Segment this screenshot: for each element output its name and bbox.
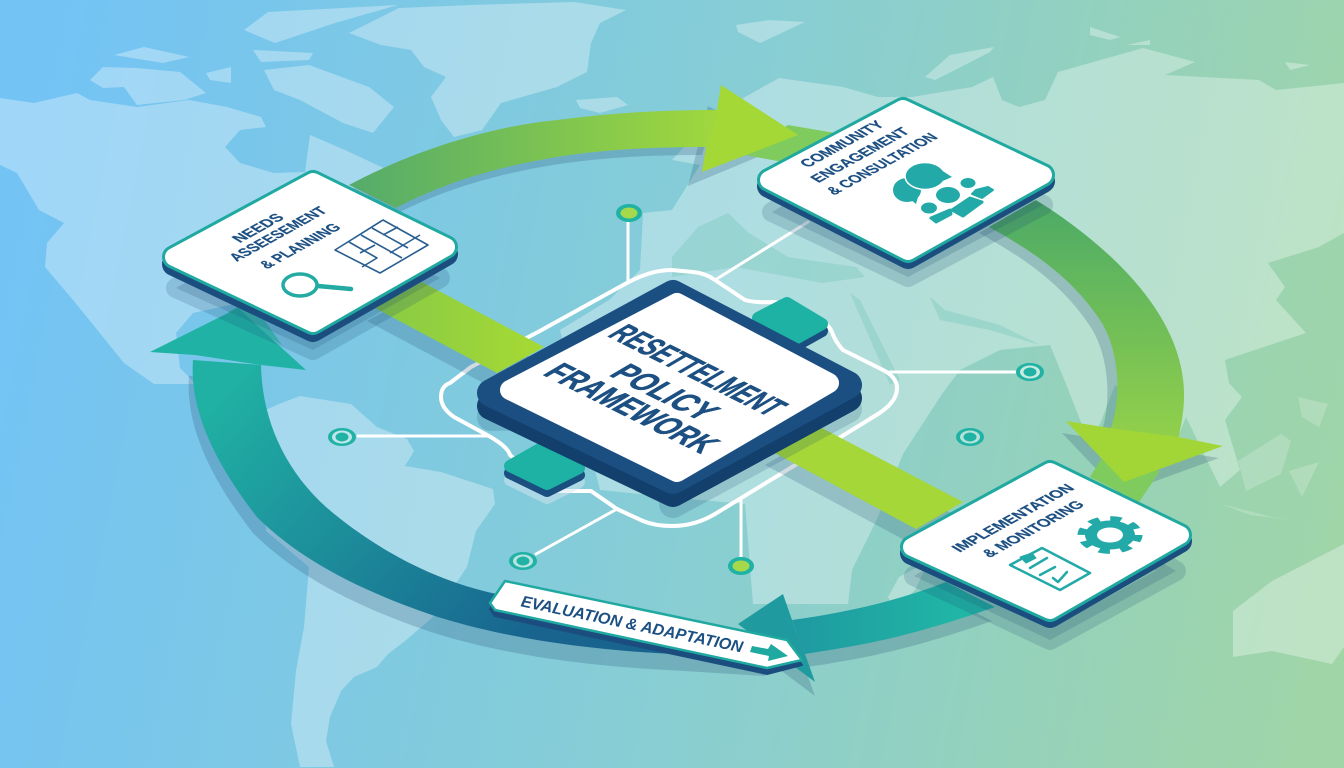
card label text: COMMUNITY <box>796 118 888 170</box>
card label text: & MONITORING <box>978 498 1089 560</box>
southeast asian islands <box>1221 397 1328 520</box>
lime connector bars <box>375 282 963 529</box>
arrow: needs assessment to community engagement <box>349 85 835 208</box>
icon: gear <box>1082 519 1138 551</box>
central panel: resettlement policy framework <box>491 294 848 504</box>
central title text: POLICY <box>601 359 728 425</box>
card label text: ENGAGEMENT <box>806 125 914 185</box>
arrow: evaluation back to needs assessment <box>150 300 770 660</box>
arrow: implementation to evaluation <box>738 582 995 682</box>
banner label text: EVALUATION & ADAPTATION <box>519 594 745 656</box>
central panel tabs <box>510 303 822 498</box>
card label text: IMPLEMENTATION <box>948 482 1079 555</box>
inland seas <box>672 213 1040 385</box>
lime connector bar shadows <box>367 295 955 542</box>
card: implementation and monitoring <box>912 472 1180 616</box>
card label text: & PLANNING <box>255 221 345 271</box>
central title text <box>535 320 796 458</box>
arrow: community engagement to implementation <box>989 200 1223 502</box>
icon: banner arrow <box>750 644 788 661</box>
card: community engagement and consultation <box>769 109 1043 257</box>
icon: speech bubbles and people <box>893 162 993 222</box>
card label text <box>225 204 345 271</box>
central title text: RESETTELMENT <box>600 320 796 421</box>
icon: grid plan <box>335 220 428 273</box>
icon: clipboard checklist <box>1010 548 1090 590</box>
icon: magnifying glass <box>283 274 351 296</box>
central title text: FRAMEWORK <box>535 358 728 458</box>
card shadows <box>176 135 1176 640</box>
card label text: & CONSULTATION <box>822 131 942 197</box>
arrow shadows <box>189 106 1219 696</box>
card label text: ASSEESEMENT <box>225 204 332 264</box>
card: needs assessment and planning <box>174 182 446 330</box>
card label text: NEEDS <box>228 211 288 245</box>
map node markers <box>328 204 1044 575</box>
network connector lines <box>358 222 1015 557</box>
banner: evaluation and adaptation <box>490 581 802 674</box>
